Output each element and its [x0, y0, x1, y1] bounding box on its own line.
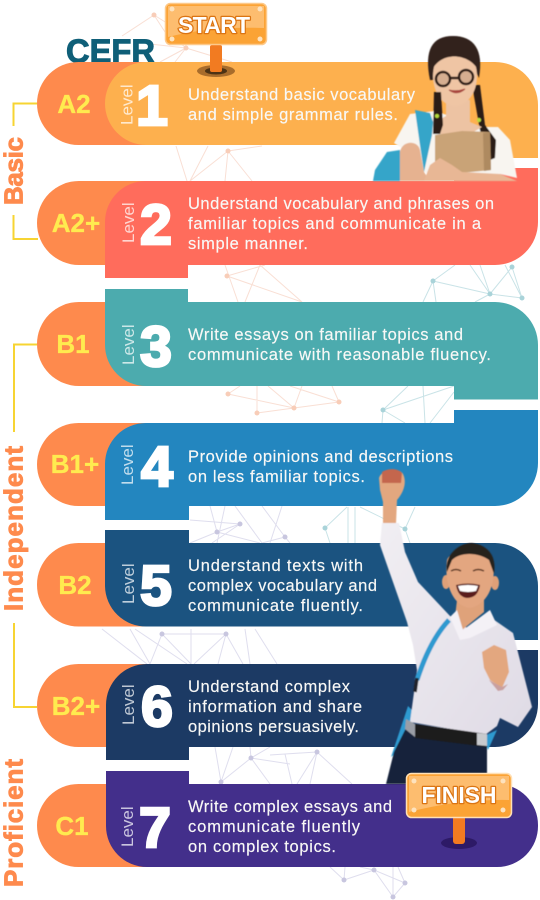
trousers	[386, 726, 487, 784]
description 7	[188, 798, 392, 856]
band level 5	[105, 530, 538, 640]
title: CEFR: CEFR	[66, 32, 155, 70]
Level label 3: Level	[119, 324, 138, 365]
upper arm	[400, 143, 430, 181]
clenched hand	[482, 645, 509, 688]
description 5: complex vocabulary and	[188, 577, 377, 595]
description 4	[188, 448, 453, 486]
Level label 5: Level	[119, 563, 138, 604]
description 6: opinions persuasively.	[188, 718, 359, 736]
fist fingers	[382, 469, 402, 483]
description 2: simple manner.	[188, 235, 308, 253]
number 6: 6	[141, 675, 173, 739]
code pill B1+	[37, 423, 187, 506]
description 1	[188, 86, 416, 124]
ears	[442, 575, 499, 590]
code pill A2	[37, 62, 187, 145]
code pill B2+	[37, 664, 187, 747]
glasses	[436, 70, 473, 86]
photo: cheering boy	[379, 469, 532, 784]
description 4: Provide opinions and descriptions	[188, 448, 453, 466]
description 7: on complex topics.	[188, 838, 336, 856]
code pill B1	[37, 302, 187, 386]
description 5: Understand texts with	[188, 557, 363, 575]
description 3: communicate with reasonable fluency.	[188, 346, 491, 364]
face	[433, 46, 477, 106]
closed eyes	[451, 570, 484, 571]
Level label 7: Level	[118, 806, 137, 847]
level 5 row	[37, 530, 538, 640]
shirt	[380, 523, 532, 735]
FINISH sign	[406, 774, 512, 849]
description 5	[188, 557, 377, 615]
description 4: on less familiar topics.	[188, 468, 365, 486]
level 3 row	[37, 289, 538, 400]
Level label 4: Level	[118, 444, 137, 485]
band level 2	[105, 168, 538, 278]
book	[435, 131, 491, 175]
Level label 1: Level	[118, 84, 136, 125]
code pill C1	[37, 784, 187, 867]
level 7 row	[37, 771, 538, 867]
level 6 row	[37, 650, 538, 760]
START sign	[166, 4, 266, 77]
number 7: 7	[139, 796, 171, 860]
braid right back	[472, 85, 496, 160]
code pill B2	[37, 543, 187, 626]
code B1+: B1+	[51, 449, 99, 479]
background network: orange	[122, 12, 342, 416]
code A2+: A2+	[52, 208, 100, 238]
hair	[428, 36, 480, 80]
collar	[450, 610, 497, 640]
background network: lavender	[102, 506, 408, 900]
raised fist	[379, 470, 405, 524]
number 1: 1	[136, 74, 168, 138]
description 6: information and share	[188, 698, 362, 716]
braid left	[433, 92, 443, 134]
number 3: 3	[140, 315, 172, 379]
blue strap lower	[391, 706, 416, 757]
FINISH sign: FINISH	[422, 782, 496, 808]
description 2: Understand vocabulary and phrases on	[188, 195, 494, 213]
description 6: Understand complex	[188, 678, 351, 696]
band level 6	[106, 650, 538, 760]
description 2: familiar topics and communicate in a	[188, 215, 482, 233]
band level 1	[105, 62, 538, 158]
open mouth	[456, 584, 480, 598]
START sign: START	[178, 12, 250, 38]
description 7: communicate fluently	[188, 818, 361, 836]
description 7: Write complex essays and	[188, 798, 392, 816]
neck	[436, 100, 482, 134]
code B2: B2	[58, 570, 92, 600]
band level 4	[105, 410, 538, 520]
code pill A2+	[37, 181, 187, 265]
forearm and hand	[424, 158, 517, 181]
number 4: 4	[141, 435, 173, 499]
level 2 row	[37, 168, 538, 278]
Level label 6: Level	[119, 684, 138, 725]
group label: Independent	[0, 344, 37, 707]
neck	[455, 600, 484, 630]
belt	[415, 724, 487, 747]
hair fringe	[432, 43, 478, 70]
code B1: B1	[56, 329, 90, 359]
description 5: communicate fluently.	[188, 597, 363, 615]
smile	[449, 89, 465, 93]
strap buckle	[415, 678, 417, 692]
group label: Basic	[0, 104, 38, 239]
code C1: C1	[55, 811, 89, 841]
description 6	[188, 678, 362, 736]
hair	[447, 543, 495, 574]
blue strap tail right	[484, 730, 497, 750]
number 5: 5	[140, 554, 172, 618]
background network: teal	[322, 264, 524, 543]
band level 7	[106, 771, 538, 867]
backpack	[373, 150, 402, 181]
band level 3	[105, 289, 538, 400]
bag strap	[415, 110, 433, 172]
number 2: 2	[140, 193, 172, 257]
description 2	[188, 195, 494, 253]
level 4 row	[37, 410, 538, 520]
description 1: and simple grammar rules.	[188, 106, 398, 124]
code A2: A2	[57, 89, 91, 119]
shirt	[394, 111, 517, 178]
description 3	[188, 326, 491, 364]
blue strap upper	[417, 620, 449, 680]
hair ties	[435, 114, 481, 122]
description 1: Understand basic vocabulary	[188, 86, 416, 104]
code B2+: B2+	[52, 691, 100, 721]
Level label 2: Level	[119, 202, 138, 243]
shirt cuff shadow	[489, 680, 508, 691]
face	[446, 551, 494, 608]
description 3: Write essays on familiar topics and	[188, 326, 463, 344]
photo: girl with books	[373, 36, 517, 181]
level 1 row	[37, 62, 538, 158]
